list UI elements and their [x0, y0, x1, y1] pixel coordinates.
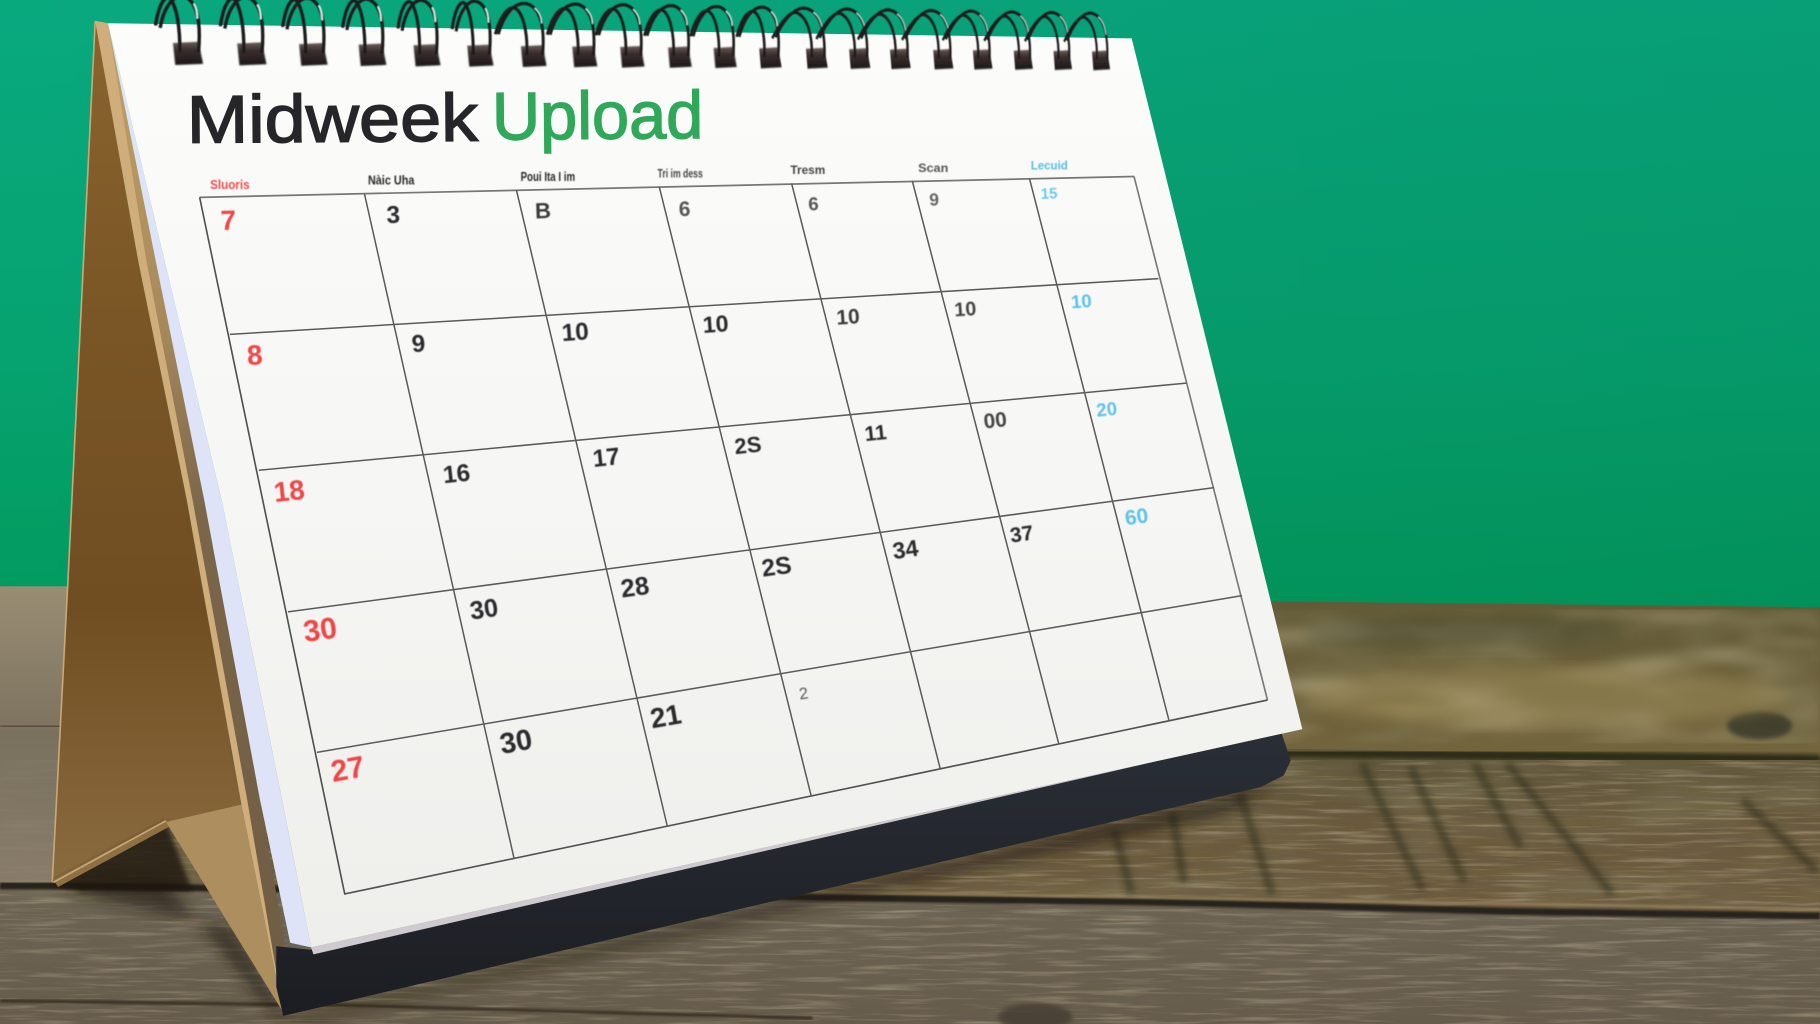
date numbers: row 4: 2S	[760, 552, 793, 583]
plank gaps	[1277, 752, 1820, 759]
date numbers: row 4: 34	[891, 535, 920, 564]
date numbers: row 3: 00	[982, 408, 1008, 433]
date numbers: row 2: 10	[1070, 290, 1092, 312]
weekday headers: Tri im dess	[658, 168, 703, 181]
date numbers: row 1: 9	[929, 189, 940, 210]
date numbers: row 2: 10	[702, 310, 729, 338]
title	[186, 78, 703, 158]
date numbers: row 4: 60	[1123, 504, 1150, 530]
date numbers: row 5: 2	[798, 684, 809, 704]
weekday headers: Poui Ita I im	[521, 169, 575, 184]
date numbers: row 4: 30	[468, 594, 500, 626]
date numbers: row 1: 6	[808, 193, 819, 214]
date numbers: row 3: 2S	[733, 431, 763, 459]
kraft tan edge	[95, 21, 283, 1012]
weekday headers: Lecuid	[1031, 160, 1068, 173]
date numbers: row 2: 9	[411, 330, 426, 358]
calendar page	[108, 23, 1302, 954]
date numbers: row 5	[328, 684, 809, 789]
date numbers: row 3	[272, 398, 1118, 508]
date numbers: row 1: 15	[1040, 185, 1058, 203]
wooden table	[0, 586, 1820, 1024]
date numbers: row 1: 3	[386, 202, 400, 229]
calendar stand: kraft back panel	[52, 21, 284, 1012]
title: Upload	[492, 78, 703, 155]
date numbers: row 2: 8	[246, 339, 264, 371]
kraft front flap	[166, 805, 283, 1012]
date numbers: row 5: 30	[497, 724, 535, 761]
calendar base: black block	[276, 733, 1291, 1016]
date numbers: row 3: 11	[863, 421, 888, 446]
base shadow on table	[53, 784, 1277, 1024]
inside of fold shadow	[53, 822, 193, 892]
grey-brown side band	[95, 21, 284, 1012]
date numbers: row 3: 20	[1095, 398, 1118, 421]
date numbers: row 1: B	[535, 198, 551, 224]
light back plank highlight	[1300, 666, 1788, 727]
weekday headers: Tresm	[790, 164, 825, 177]
weekday headers	[210, 160, 1068, 192]
date numbers: row 2: 10	[954, 298, 977, 322]
page stack edge	[108, 23, 311, 947]
date numbers: row 2	[246, 290, 1092, 371]
date numbers: row 4	[301, 504, 1150, 649]
weekday headers: Nàic Uha	[368, 173, 415, 188]
wood streaks	[1114, 763, 1817, 894]
calendar grid	[200, 176, 1268, 894]
date numbers: row 2: 10	[561, 318, 590, 347]
date numbers: row 4: 30	[301, 612, 339, 649]
date numbers: row 5: 21	[648, 698, 684, 734]
date numbers: row 1: 7	[220, 205, 237, 236]
date numbers: row 4: 28	[619, 572, 651, 604]
date numbers: row 5: 27	[328, 751, 367, 789]
background: green wall	[0, 0, 1820, 615]
date numbers: row 3: 16	[442, 460, 471, 489]
date numbers: row 1: 6	[678, 198, 691, 221]
date numbers: row 3: 17	[591, 443, 621, 473]
spiral binding	[156, 0, 1110, 70]
knots	[1727, 712, 1792, 740]
weekday headers: Sluoris	[210, 177, 250, 192]
weekday headers: Scan	[918, 162, 948, 175]
date numbers: row 4: 37	[1009, 522, 1035, 548]
title: Midweek	[186, 81, 479, 158]
date numbers: row 1	[220, 185, 1058, 236]
date numbers: row 3: 18	[272, 474, 306, 508]
date numbers: row 2: 10	[836, 305, 860, 330]
